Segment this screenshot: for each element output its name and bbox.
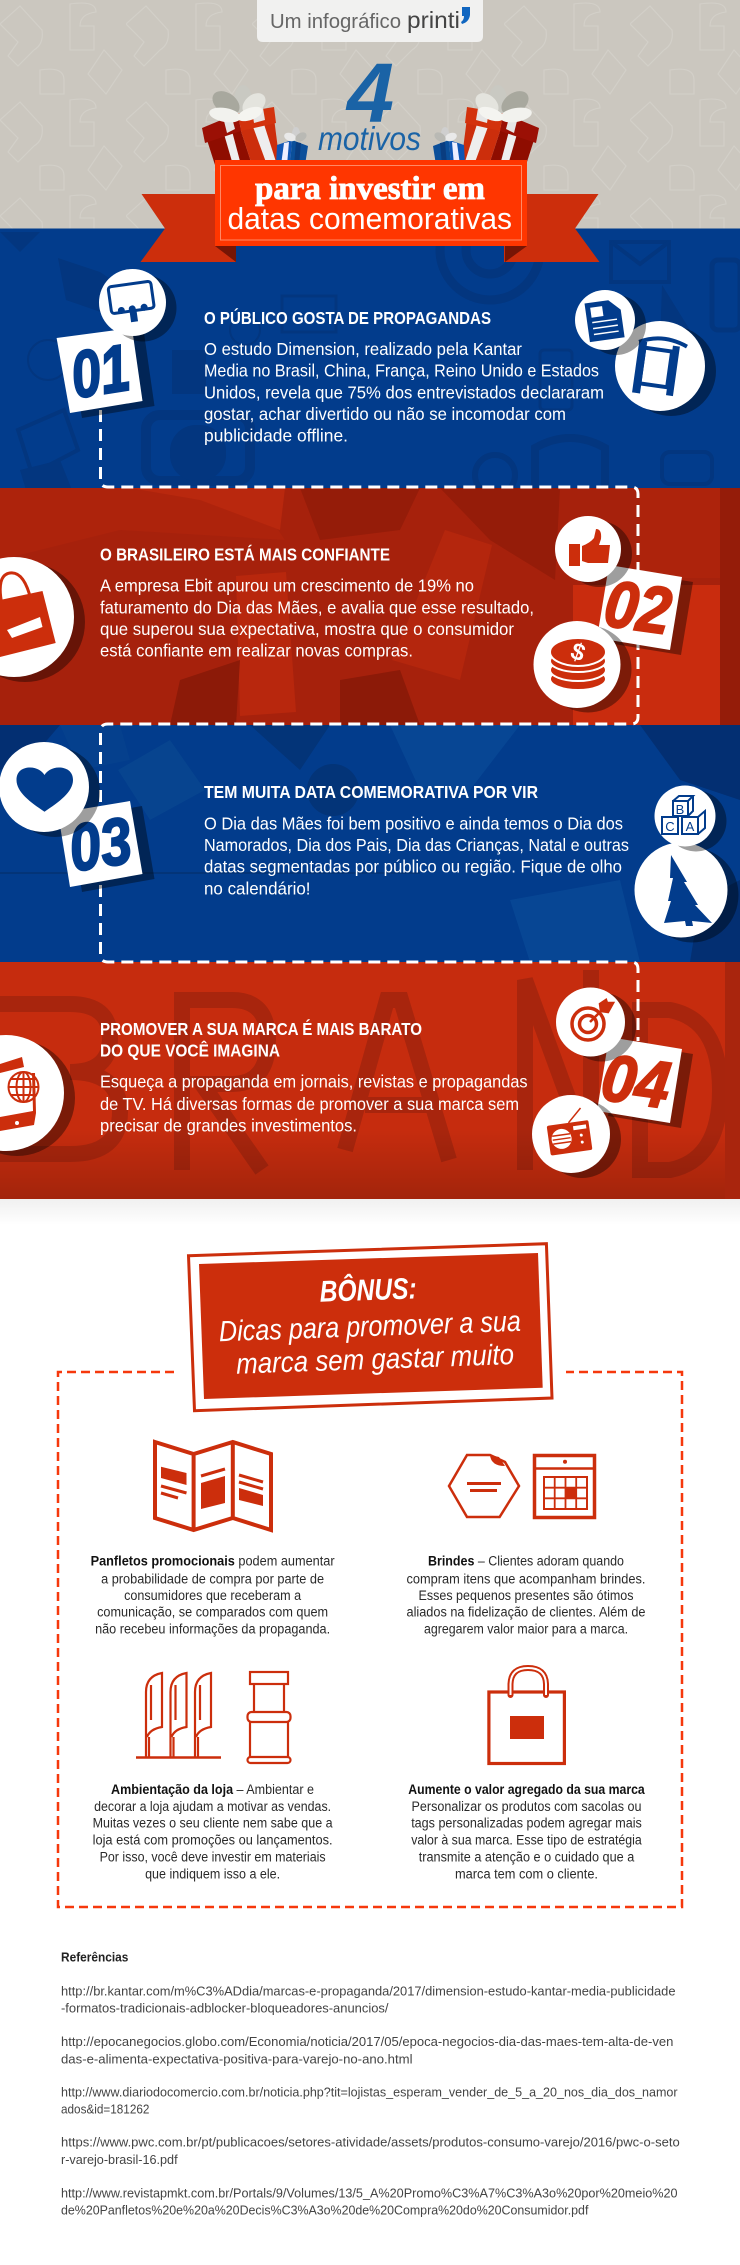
- heading: O PÚBLICO GOSTA DE PROPAGANDAS: [204, 307, 491, 328]
- number card 04: 04: [597, 1040, 675, 1122]
- heading: O BRASILEIRO ESTÁ MAIS CONFIANTE: [100, 544, 390, 565]
- icon: thumbs up circle: [555, 516, 632, 587]
- text block: Esqueça a propaganda em jornais, revistas e propagandas: [100, 1072, 528, 1092]
- icon: coins circle: $: [567, 637, 589, 668]
- text: panfletos: consumidores que receberam a: [124, 1588, 302, 1603]
- text block: datas segmentadas por público ou região. Fique de olho: [204, 857, 622, 877]
- references: http://epocanegocios.globo.com/Economia/noticia/2017/05/epoca-negocios-dia-das-maes-tem-alta-de-ven: [61, 2035, 673, 2049]
- text: valor agregado: tags personalizadas podem agregar mais: [411, 1816, 642, 1831]
- text: brindes: Esses pequenos presentes são ótimos: [418, 1588, 634, 1603]
- references: de%20Panfletos%20e%20a%20Decis%C3%A3o%20de%20Compra%20do%20Consumidor.pdf: [61, 2203, 589, 2217]
- text: valor agregado: Aumente o valor agregado da sua marca: [408, 1782, 645, 1797]
- icon: billboard circle: [99, 269, 176, 342]
- panel: motivo 1: [57, 269, 716, 446]
- heading: PROMOVER A SUA MARCA É MAIS BARATO: [100, 1018, 422, 1039]
- section 2 background: red shopping photo: [0, 488, 740, 725]
- references: ados&id=181262: [61, 2102, 149, 2116]
- text: ambientação: que indiquem isso a ele.: [145, 1866, 280, 1881]
- text block: [100, 1072, 528, 1136]
- references: https://www.pwc.com.br/pt/publicacoes/setores-atividade/assets/produtos-consumo-varejo/2016/pwc-o-seto: [61, 2136, 680, 2150]
- icon: gifts left: [202, 85, 308, 165]
- panel: bonus dashed frame: [58, 1372, 682, 1907]
- text block: publicidade offline.: [204, 426, 348, 446]
- bonus title box: Dicas para promover a sua: [218, 1306, 521, 1348]
- icon: branded bag: [489, 1668, 564, 1764]
- text block: [100, 576, 534, 661]
- section 4 background: BRAND letter plates: [0, 962, 740, 1199]
- text: ambientação: loja está com promoções ou lançamentos.: [93, 1832, 333, 1847]
- icon: tree circle: [634, 842, 738, 942]
- panel: motivo 3: [0, 742, 738, 942]
- light fade below sections: [0, 1199, 740, 1225]
- text: ambientação: Muitas vezes o seu cliente nem sabe que a: [93, 1816, 333, 1831]
- text: valor agregado: marca tem com o cliente.: [455, 1866, 598, 1881]
- icon: ABC blocks circle: A: [686, 819, 695, 834]
- text: panfletos: Panfletos promocionais podem aumentar: [91, 1554, 335, 1569]
- tag: um infográfico printi: Um infográfico: [270, 11, 401, 33]
- text block: está confiante em realizar novas compras.: [100, 641, 413, 661]
- text: brindes: compram itens que acompanham brindes.: [406, 1571, 646, 1586]
- heading: TEM MUITA DATA COMEMORATIVA POR VIR: [204, 782, 538, 802]
- references: das-e-alimenta-expectativa-positiva-para-varejo-no-ano.html: [61, 2052, 412, 2066]
- banner: [140, 160, 600, 262]
- text: valor agregado: Personalizar os produtos com sacolas ou: [412, 1799, 642, 1814]
- text: brindes: [406, 1554, 646, 1636]
- number card 03: 03: [64, 803, 137, 885]
- icon: store flags and stand: [136, 1672, 290, 1763]
- references: [61, 1950, 680, 2217]
- text: panfletos: não recebeu informações da propaganda.: [95, 1621, 330, 1636]
- text: brindes: aliados na fidelização de clientes. Além de: [406, 1605, 646, 1620]
- text block: gostar, achar divertido ou não se incomodar com: [204, 404, 566, 424]
- section 1 background: blue with advertising icons: [0, 200, 740, 495]
- icon: heart circle: [0, 742, 100, 837]
- text: ambientação: Por isso, você deve investir em materiais: [100, 1850, 326, 1865]
- icon: document circle: [575, 290, 646, 355]
- references: http://br.kantar.com/m%C3%ADdia/marcas-e-propaganda/2017/dimension-estudo-kantar-media-publicidade: [61, 1985, 676, 1999]
- text: panfletos: a probabilidade de compra por parte de: [101, 1571, 324, 1586]
- text block: O Dia das Mães foi bem positivo e ainda temos o Dia dos: [204, 813, 623, 833]
- icon: gifts right: [433, 85, 539, 165]
- text block: [204, 339, 604, 446]
- icon: bus stop circle: [615, 321, 716, 416]
- title: motivos: motivos: [318, 120, 421, 157]
- icon: smartphone globe circle: [0, 1035, 75, 1156]
- text: panfletos: comunicação, se comparados com quem: [97, 1605, 328, 1620]
- references: Referências: [61, 1950, 128, 1965]
- panel: motivo 2: [0, 516, 693, 712]
- tag: um infográfico printi: printi: [407, 7, 460, 33]
- icon: ABC blocks circle: [654, 786, 726, 852]
- text: ambientação: Ambientação da loja – Ambientar e: [111, 1782, 314, 1797]
- panel: motivo 4: [0, 988, 693, 1178]
- heading: DO QUE VOCÊ IMAGINA: [100, 1040, 280, 1061]
- number card 01: 01: [66, 330, 135, 412]
- section 3 background: blue gifts photo: [0, 725, 740, 962]
- text block: no calendário!: [204, 878, 310, 898]
- text block: Media no Brasil, China, França, Reino Unido e Estados: [204, 361, 599, 381]
- text block: de TV. Há diversas formas de promover a sua marca sem: [100, 1094, 519, 1114]
- heading: [100, 1018, 422, 1061]
- text block: O estudo Dimension, realizado pela Kantar: [204, 339, 522, 359]
- text block: [204, 813, 629, 898]
- number card 02: 02: [600, 566, 676, 648]
- text: ambientação: decorar a loja ajudam a motivar as vendas.: [94, 1799, 331, 1814]
- dashed connector line: [100, 410, 638, 1041]
- text: ambientação: [93, 1782, 333, 1881]
- icon: ABC blocks circle: B: [676, 802, 684, 817]
- references: http://www.revistapmkt.com.br/Portals/9/Volumes/13/5_A%20Promo%C3%A7%C3%A3o%20por%20meio%20: [61, 2186, 678, 2200]
- bonus title box: BÔNUS:: [319, 1271, 417, 1309]
- banner: datas comemorativas: [228, 201, 512, 236]
- icon: ABC blocks circle: C: [665, 819, 675, 834]
- text block: que superou sua expectativa, mostra que o consumidor: [100, 619, 514, 639]
- text block: faturamento do Dia das Mães, e avalia que esse resultado,: [100, 597, 534, 617]
- icon: coins circle: [534, 621, 632, 712]
- text block: Namorados, Dia dos Pais, Dia das Crianças, Natal e outras: [204, 835, 629, 855]
- banner: para investir em: [255, 171, 485, 207]
- text block: precisar de grandes investimentos.: [100, 1116, 357, 1136]
- icon: target circle: [556, 988, 636, 1062]
- bonus title box: marca sem gastar muito: [236, 1339, 515, 1381]
- icon: radio circle: [532, 1095, 621, 1178]
- tag: um infográfico printi: [257, 0, 483, 42]
- icon: pamphlet: [155, 1442, 271, 1530]
- text: valor agregado: transmite a atenção e o cuidado que a: [419, 1850, 635, 1865]
- title: 4: 4: [345, 46, 394, 140]
- text: valor agregado: valor à sua marca. Esse tipo de estratégia: [411, 1832, 642, 1847]
- text: panfletos: [91, 1554, 335, 1636]
- text: brindes: agregarem valor maior para a marca.: [424, 1621, 628, 1636]
- text block: Unidos, revela que 75% dos entrevistados declararam: [204, 382, 604, 402]
- text: valor agregado: [408, 1782, 645, 1881]
- text block: A empresa Ebit apurou um crescimento de 19% no: [100, 576, 474, 596]
- references: http://www.diariodocomercio.com.br/noticia.php?tit=lojistas_esperam_vender_de_5_a_20_nos_dia_dos_namor: [61, 2086, 678, 2100]
- bonus title box: [188, 1244, 552, 1411]
- icon: brindes tag and calendar: [449, 1455, 594, 1518]
- references: r-varejo-brasil-16.pdf: [61, 2153, 178, 2167]
- text: brindes: Brindes – Clientes adoram quando: [428, 1554, 624, 1569]
- references: -formatos-tradicionais-adblocker-bloqueadores-anuncios/: [61, 2002, 389, 2016]
- icon: shopping bag circle: [0, 557, 85, 682]
- header background: [0, 0, 740, 229]
